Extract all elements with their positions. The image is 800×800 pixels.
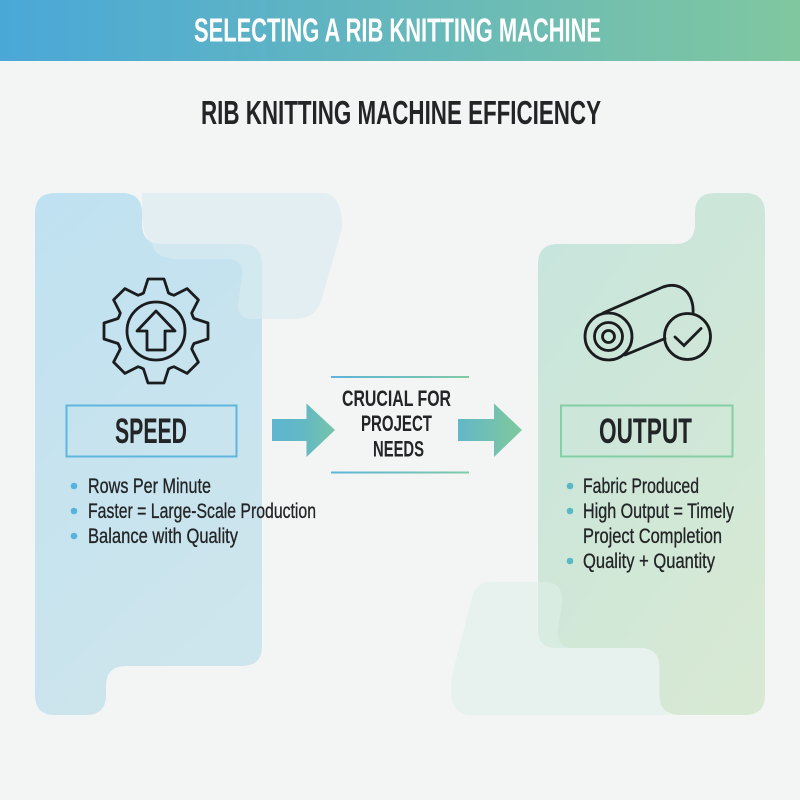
output bullet list	[567, 475, 734, 573]
speed bullet list: Rows Per Minute	[88, 475, 211, 498]
speed label	[66, 406, 236, 456]
output label: OUTPUT	[599, 412, 692, 451]
subtitle heading: RIB KNITTING MACHINE EFFICIENCY	[201, 94, 601, 131]
arrow: speed to message	[272, 404, 335, 457]
speed bullet list	[71, 475, 316, 548]
output bullet list: High Output = Timely	[583, 500, 734, 523]
icon: fabric roll with check	[585, 285, 710, 360]
output bullet list: Fabric Produced	[583, 475, 699, 498]
callout: crucial for project needs: NEEDS	[373, 436, 424, 462]
callout: crucial for project needs: CRUCIAL FOR	[342, 386, 451, 411]
output label	[561, 406, 732, 456]
title: SELECTING A RIB KNITTING MACHINE	[194, 12, 601, 48]
speed label: SPEED	[115, 412, 187, 451]
panel: speed	[35, 193, 342, 715]
speed bullet list: Faster = Large-Scale Production	[88, 500, 316, 523]
icon: gear with up arrow	[104, 279, 208, 383]
header banner	[0, 0, 800, 61]
callout: crucial for project needs	[331, 376, 469, 474]
output bullet list: Project Completion	[583, 525, 722, 548]
panel: output	[451, 193, 765, 715]
output bullet list: Quality + Quantity	[583, 550, 715, 573]
callout: crucial for project needs: PROJECT	[361, 411, 432, 436]
arrow: message to output	[458, 404, 522, 457]
speed bullet list: Balance with Quality	[88, 525, 238, 548]
